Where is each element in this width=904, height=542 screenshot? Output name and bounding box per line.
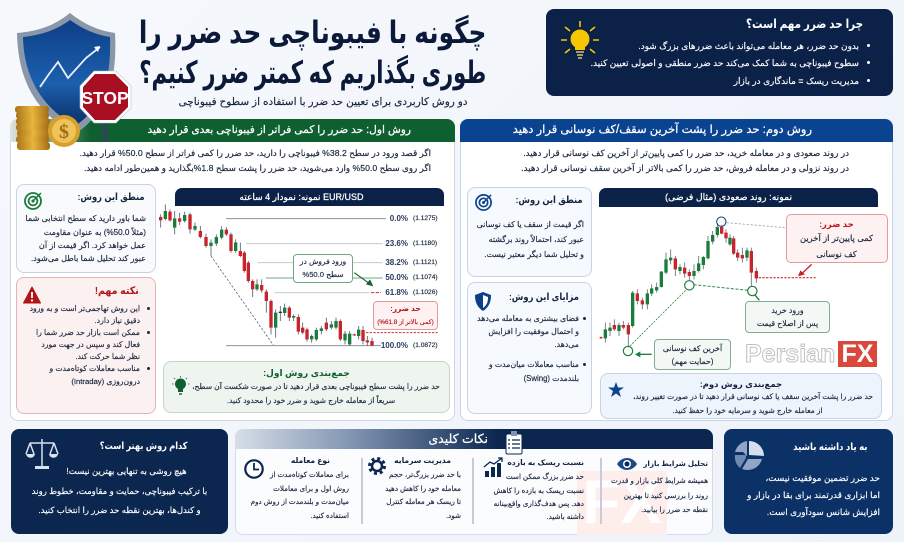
logic text: عبور کند، احتمالاً روند برگشته [489, 235, 584, 244]
heading: منطق این روش: [78, 192, 145, 203]
method two intro: در روند نزولی و در معامله فروش، حد ضرر را کمی بالاتر از آخرین سقف نوسانی قرار دهید. [521, 163, 849, 173]
heading: نسبت ریسک به بازده [507, 458, 584, 467]
key point: market conditions [611, 458, 708, 514]
method two intro [521, 148, 849, 174]
logic text: (مثلاً 50.0%) به عنوان مقاومت [44, 228, 146, 237]
text: حد ضرر تضمین موفقیت نیست، [765, 473, 880, 483]
bullet list: بدون حد ضرر، هر معامله می‌تواند باعث ضررهای بزرگ شود. [638, 41, 859, 51]
callout: last swing low [654, 339, 731, 370]
summary text [192, 382, 440, 406]
heading: به یاد داشته باشید [794, 442, 868, 453]
callout: buy entry: پس از اصلاح قیمت [757, 319, 818, 328]
candlesticks, swing markers and dashes [600, 216, 816, 358]
summary text: حد ضرر را پشت سطح فیبوناچی بعدی قرار دهید تا در صورت شکست آن سطح، [192, 382, 440, 391]
benefits list: مناسب معاملات میان‌مدت و [489, 360, 579, 369]
fibonacci level labels: (1.1074) [413, 274, 438, 281]
callout: stop loss: حد ضرر: [390, 304, 421, 313]
summary text: از معامله خارج شوید و سرمایه خود را حفظ کنید. [672, 406, 823, 415]
method one header: روش اول: حد ضرر را کمی فراتر از فیبوناچی بعدی قرار دهید [148, 124, 411, 136]
illustration: shield, stop sign and coins: $ [59, 121, 69, 143]
chart header: نمونه: روند صعودی (مثال فرضی) [665, 192, 792, 202]
text: استفاده کنید. [310, 511, 349, 520]
text: اما ابزاری قدرتمند برای بقا در بازار و [747, 490, 880, 500]
text: میان‌مدت و بلندمدت از روش دوم [251, 497, 349, 506]
logo watermark: PersianFX: FX [842, 340, 873, 368]
heading: چرا حد ضرر مهم است؟ [746, 17, 863, 31]
text [251, 470, 349, 520]
text: با ترکیب فیبوناچی، حمایت و مقاومت، خطوط روند [32, 486, 207, 496]
icon: target [24, 192, 42, 210]
watermark: FX: FX [582, 468, 662, 537]
key point: risk reward [484, 457, 584, 521]
logic text: عبور کند تحلیل شما باطل می‌شود. [31, 254, 146, 263]
panel: remember [724, 429, 893, 534]
callout: stop loss below last low: کف نوسانی [816, 249, 857, 259]
method one intro: اگر روی سطح 50.0% وارد می‌شوید، حد ضرر را پشت سطح 1.8%بگذارید و همین‌طور ادامه دهید. [84, 163, 431, 173]
key points header: نکات کلیدی [428, 432, 488, 446]
note list: ممکن است بازار حد ضرر شما را [36, 328, 140, 337]
candlesticks and fibonacci lines [159, 204, 438, 346]
benefits list: و احتمال موفقیت را افزایش [488, 327, 579, 336]
callout: stop loss below last low: کمی پایین‌تر از آخرین [800, 233, 873, 243]
chart header: نمونه: نمودار 4 ساعته EUR/USD [239, 192, 364, 202]
method two intro: در روند صعودی و در معامله خرید، حد ضرر را کمی پایین‌تر از آخرین کف نوسانی قرار دهید. [523, 148, 849, 158]
icon: warning triangle [23, 286, 41, 304]
text: هیچ روشی به تنهایی بهترین نیست! [66, 466, 187, 476]
text [611, 476, 708, 514]
icon: rising bars [484, 457, 503, 477]
fibonacci level labels: (1.1121) [413, 259, 437, 266]
box: method benefits [467, 282, 592, 414]
chart: uptrend example [599, 188, 888, 370]
method one intro: اگر قصد ورود در سطح 38.2% فیبوناچی را دارید، حد ضرر را کمی فراتر از سطح 50.0% قرار دهید. [80, 148, 431, 158]
method two header [460, 119, 893, 142]
fibonacci level labels: 61.8% [385, 288, 408, 297]
bullet list [591, 41, 870, 86]
benefits list: بلندمدت (Swing) [524, 374, 579, 383]
key point: money management [368, 456, 461, 520]
text: حد ضرر بزرگ ممکن است [506, 472, 584, 481]
callout: stop loss: (کمی بالاتر از 61.8%) [377, 319, 434, 326]
callout: last swing low: (حمایت مهم) [672, 357, 713, 366]
text: روند را بررسی کنید تا بهترین [624, 491, 708, 500]
benefits list: می‌دهد. [554, 340, 579, 349]
callout: sell entry [293, 254, 353, 283]
box: method logic [467, 187, 592, 277]
heading: کدام روش بهتر است؟ [100, 441, 188, 452]
text: معامله خود را کاهش دهید [385, 484, 461, 493]
note list: فعال کند و سپس در جهت مورد [41, 340, 140, 349]
fibonacci level labels: 100.0% [381, 341, 408, 350]
note list: نظر شما حرکت کند. [75, 352, 140, 361]
box: method two summary [600, 373, 882, 419]
summary text [633, 392, 873, 416]
logic text [25, 214, 146, 264]
chart header [175, 188, 444, 206]
text: برای معاملات کوتاه‌مدت از [270, 470, 349, 479]
callout: last swing low: آخرین کف نوسانی [663, 344, 722, 353]
logic text: عمل خواهد کرد. اگر قیمت از آن [39, 241, 146, 250]
heading: نوع معامله [291, 456, 330, 465]
heading: مزایای این روش: [509, 292, 579, 303]
summary text: حد ضرر را پشت آخرین سقف یا کف نوسانی قرار دهید تا در صورت تغییر روند، [633, 392, 873, 401]
icon: light bulb [561, 21, 599, 59]
method one intro [80, 148, 431, 174]
icon: pie chart [734, 441, 764, 470]
logic text: اگر قیمت از سقف یا کف نوسانی [477, 220, 584, 229]
key points header [235, 429, 713, 449]
note list: این روش تهاجمی‌تر است و به ورود [30, 304, 140, 313]
icon: target [475, 194, 492, 211]
icon: eye [617, 458, 637, 470]
box: method one summary [163, 361, 450, 413]
fibonacci level labels: 0.0% [390, 214, 408, 223]
text: شود. [446, 511, 461, 520]
text: نقطه حد ضرر را بیابید. [641, 505, 708, 514]
heading: جمع‌بندی روش دوم: [700, 379, 782, 389]
logic text: شما باور دارید که سطح انتخابی شما [25, 214, 146, 223]
callout: stop loss below last low [786, 214, 888, 263]
logic text [477, 220, 584, 260]
benefits list [477, 314, 586, 383]
note list [30, 304, 150, 386]
bullet list: مدیریت ریسک = ماندگاری در بازار [734, 76, 859, 86]
text: افزایش شانس سودآوری است. [767, 507, 880, 517]
note list: درون‌روزی (Intraday) [71, 377, 140, 386]
note list: دقیق نیاز دارد. [95, 316, 140, 325]
text [32, 466, 207, 516]
subtitle: دو روش کاربردی برای تعیین حد ضرر با استفاده از سطوح فیبوناچی [178, 96, 468, 108]
box: method logic [16, 184, 156, 273]
panel: which method is better [11, 429, 228, 534]
heading: نکته مهم! [95, 285, 139, 297]
fibonacci level labels: (1.1026) [413, 289, 438, 296]
summary text: سریعاً از معامله خارج شوید و ضرر خود را محدود کنید. [227, 396, 395, 405]
title: چگونه با فیبوناچی حد ضرر را [138, 15, 486, 50]
key point: trade type [244, 456, 349, 520]
text [385, 470, 461, 520]
chart header [599, 188, 878, 207]
text: نسبت ریسک به بازده را کاهش [494, 486, 584, 495]
callout: stop loss [373, 301, 438, 330]
text: تا ریسک هر معامله کنترل [386, 497, 461, 506]
panel: method one [10, 119, 455, 421]
title [138, 14, 486, 90]
callout: sell entry: ورود فروش در [300, 257, 346, 266]
heading: منطق این روش: [516, 195, 583, 206]
icon: green bulb [172, 376, 190, 395]
text: روش اول و برای معاملات [273, 484, 349, 493]
fibonacci level labels: 23.6% [385, 239, 408, 248]
illustration: shield, stop sign and coins [15, 13, 132, 150]
text: دهد. پس هدف‌گذاری واقع‌بینانه [494, 499, 584, 508]
callout: buy entry: ورود خرید [771, 306, 804, 315]
icon: shield [475, 292, 491, 311]
logic text: و تحلیل شما دیگر معتبر نیست. [484, 250, 584, 259]
text [728, 471, 891, 521]
fibonacci level labels: (1.0872) [413, 342, 438, 349]
heading: تحلیل شرایط بازار [643, 459, 708, 468]
fibonacci level labels: 38.2% [385, 258, 408, 267]
icon: scales [25, 439, 59, 469]
text: داشته باشید. [547, 512, 584, 521]
fibonacci level labels: (1.1180) [413, 240, 437, 247]
icon: gear [368, 457, 386, 475]
illustration: shield, stop sign and coins: STOP [81, 88, 129, 108]
text [494, 472, 584, 521]
note list: مناسب معاملات کوتاه‌مدت و [49, 364, 140, 373]
callout: sell entry: سطح 50.0% [302, 270, 344, 279]
benefits list: فضای بیشتری به معامله می‌دهد [477, 314, 579, 323]
text: و کندل‌ها، بهترین نقطه حد ضرر را انتخاب کنید. [38, 505, 201, 515]
text: همیشه شرایط کلی بازار و قدرت [611, 476, 708, 485]
fibonacci level labels: (1.1275) [413, 215, 438, 222]
bullet list: سطوح فیبوناچی به شما کمک می‌کند حد ضرر منطقی و اصولی تعیین کنید. [591, 58, 859, 68]
method two header: روش دوم: حد ضرر را پشت آخرین سقف/کف نوسانی قرار دهید [513, 124, 812, 136]
fibonacci level labels [381, 214, 438, 350]
panel: method two [460, 119, 893, 421]
chart: EUR/USD fibonacci [159, 188, 444, 350]
icon: clipboard [506, 431, 522, 454]
callout: buy entry [745, 301, 830, 333]
callout: stop loss below last low: حد ضرر: [819, 219, 854, 229]
panel: key points [235, 429, 713, 535]
logo watermark: PersianFX: Persian [745, 340, 835, 368]
heading: جمع‌بندی روش اول: [263, 368, 350, 378]
title: طوری بگذاریم که کمتر ضرر کنیم؟ [139, 55, 486, 90]
icon: clock [244, 459, 264, 479]
logo watermark: PersianFX [745, 340, 877, 368]
icon: star [608, 382, 624, 397]
method one header [10, 119, 455, 142]
text: با حد ضرر بزرگ‌تر، حجم [389, 470, 461, 479]
panel: why stop loss matters [546, 9, 893, 96]
fibonacci level labels: 50.0% [385, 273, 408, 282]
box: important note [16, 277, 156, 414]
heading: مدیریت سرمایه [394, 456, 451, 465]
